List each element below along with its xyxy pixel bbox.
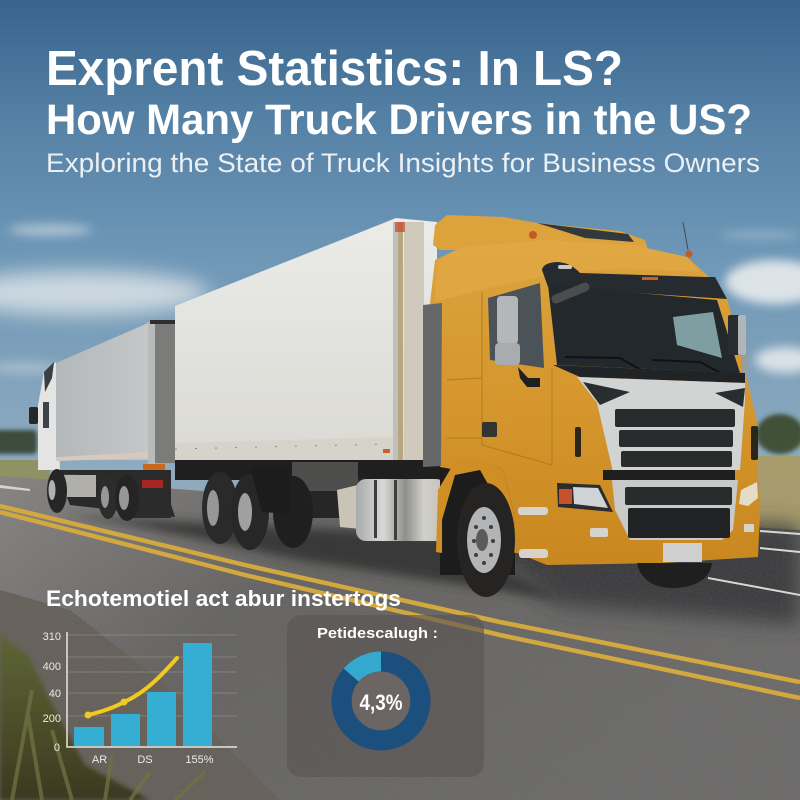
side window [488,283,544,368]
roof lights and antenna [529,222,692,258]
subtitle: Exploring the State of Truck Insights for Business Owners [46,148,760,178]
upper mirror arm [556,287,585,299]
cab body [430,240,760,565]
roadside grass [0,635,205,800]
title line 2: How Many Truck Drivers in the US? [46,96,752,144]
x axis labels: 155% [185,754,214,766]
y axis labels: 0 [54,742,60,754]
yellow trend line [84,658,177,718]
horizon trees and fields [0,414,800,532]
silver hood panel [577,377,745,472]
roof fairing [433,215,648,250]
headlights [557,482,758,512]
side vent strip [423,303,442,467]
bars [74,643,212,746]
y axis labels: 400 [43,661,61,673]
upper grille [615,409,735,467]
donut value: 4,3% [360,690,402,715]
fog lights and steps [518,507,754,558]
y axis labels [43,631,61,754]
grid lines [67,635,237,716]
rear truck wheels [47,469,139,521]
windshield [548,285,740,373]
chart section heading: Echotemotiel act abur instertogs [46,586,401,611]
rear truck and trailer [29,320,175,521]
y axis labels: 40 [49,688,61,700]
title [46,42,752,144]
trailer wheels [202,467,313,550]
side cutouts [575,427,581,457]
cab wheel arch backing [440,465,515,575]
x axis labels: AR [92,754,107,766]
side mirror [495,296,540,387]
x axis labels [92,754,214,766]
y axis labels: 200 [43,713,61,725]
title line 1: Exprent Statistics: In LS? [46,42,623,96]
door lines [447,292,552,465]
visor [542,262,727,299]
front right wheel [637,563,712,588]
front left wheel [457,483,515,597]
fuel tank [337,479,446,541]
x axis labels: DS [137,754,153,766]
donut chart [342,662,420,740]
dash band [553,365,745,383]
bar chart [43,631,237,766]
yellow cab [423,215,760,575]
axes [67,632,237,747]
y axis labels: 310 [43,631,61,643]
license plate [663,543,702,562]
road [0,476,800,800]
right mirror [728,315,748,374]
panel: donut stat [287,615,484,777]
front trailer [175,218,446,550]
lower grille [603,470,738,540]
double yellow road lines [0,506,800,698]
panel heading: Petidescalugh : [317,625,438,642]
sky background [0,0,800,500]
